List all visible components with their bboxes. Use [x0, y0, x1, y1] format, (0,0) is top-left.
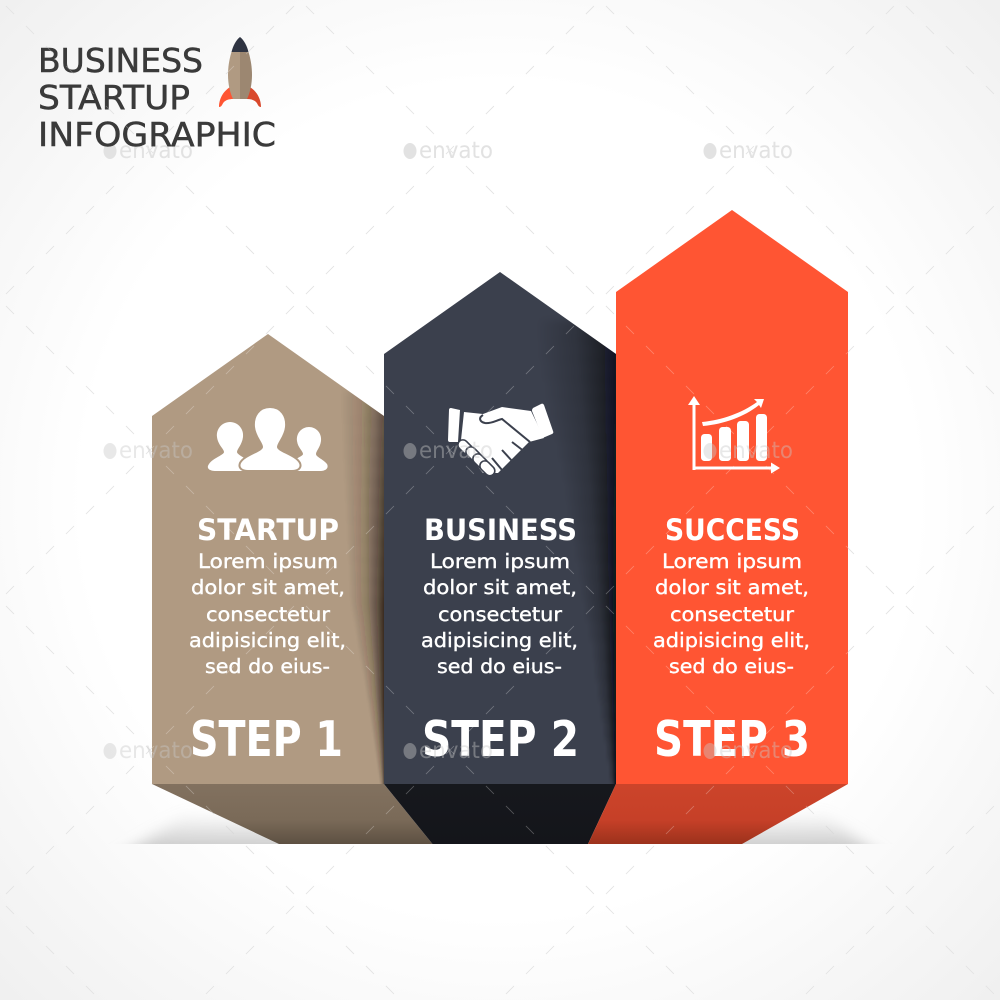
- label: step 1: STEP 1: [190, 711, 343, 768]
- watermarks: middle and bottom rows: [104, 438, 793, 764]
- watermarks: middle and bottom rows: envato: [119, 738, 193, 764]
- label: step 2: STEP 2: [422, 711, 579, 768]
- text block: step 1 body: sed do eius-: [205, 655, 330, 678]
- heading: startup: STARTUP: [197, 513, 339, 547]
- icon: growth chart: [688, 396, 780, 474]
- text block: step 2 body: Lorem ipsum: [430, 550, 570, 573]
- title: BUSINESS: [38, 41, 203, 80]
- watermarks: middle and bottom rows: envato: [119, 438, 193, 464]
- panel: step 3: [588, 210, 848, 844]
- watermarks: middle and bottom rows: envato: [719, 738, 793, 764]
- watermarks: top row: envato: [419, 138, 493, 164]
- panel: step 1: [152, 334, 432, 844]
- text block: step 1 body: adipisicing elit,: [189, 629, 346, 652]
- text block: step 3 body: [653, 550, 810, 678]
- watermarks: middle and bottom rows: envato: [419, 738, 493, 764]
- title: [38, 41, 276, 154]
- watermarks: middle and bottom rows: envato: [419, 438, 493, 464]
- text block: step 2 body: sed do eius-: [437, 655, 562, 678]
- text block: step 3 body: dolor sit amet,: [655, 576, 809, 599]
- title: STARTUP: [38, 78, 190, 117]
- text block: step 1 body: consectetur: [206, 603, 331, 626]
- watermarks: middle and bottom rows: envato: [719, 438, 793, 464]
- base: step 3 fold: [588, 784, 848, 844]
- base: step 2 fold: [384, 784, 616, 844]
- floor shadows: [128, 818, 874, 844]
- text block: step 3 body: consectetur: [670, 603, 795, 626]
- heading: success: SUCCESS: [665, 513, 800, 547]
- watermarks: top row: envato: [719, 138, 793, 164]
- title: INFOGRAPHIC: [38, 115, 276, 154]
- text block: step 3 body: adipisicing elit,: [653, 629, 810, 652]
- icon: handshake: [448, 404, 553, 478]
- text block: step 3 body: Lorem ipsum: [662, 550, 802, 573]
- base: step 1 fold: [152, 784, 432, 844]
- icon: people: [208, 407, 328, 471]
- text block: step 3 body: sed do eius-: [669, 655, 794, 678]
- watermarks: top row: [104, 138, 793, 164]
- text block: step 2 body: adipisicing elit,: [421, 629, 578, 652]
- watermarks: top row: envato: [119, 138, 193, 164]
- text block: step 1 body: dolor sit amet,: [191, 576, 345, 599]
- text block: step 1 body: [189, 550, 346, 678]
- text block: step 2 body: [421, 550, 578, 678]
- text block: step 2 body: consectetur: [438, 603, 563, 626]
- heading: business: BUSINESS: [424, 513, 577, 547]
- text block: step 2 body: dolor sit amet,: [423, 576, 577, 599]
- text block: step 1 body: Lorem ipsum: [198, 550, 338, 573]
- panel: step 2: [384, 272, 616, 844]
- icon: rocket: [219, 37, 261, 107]
- label: step 3: STEP 3: [654, 711, 810, 768]
